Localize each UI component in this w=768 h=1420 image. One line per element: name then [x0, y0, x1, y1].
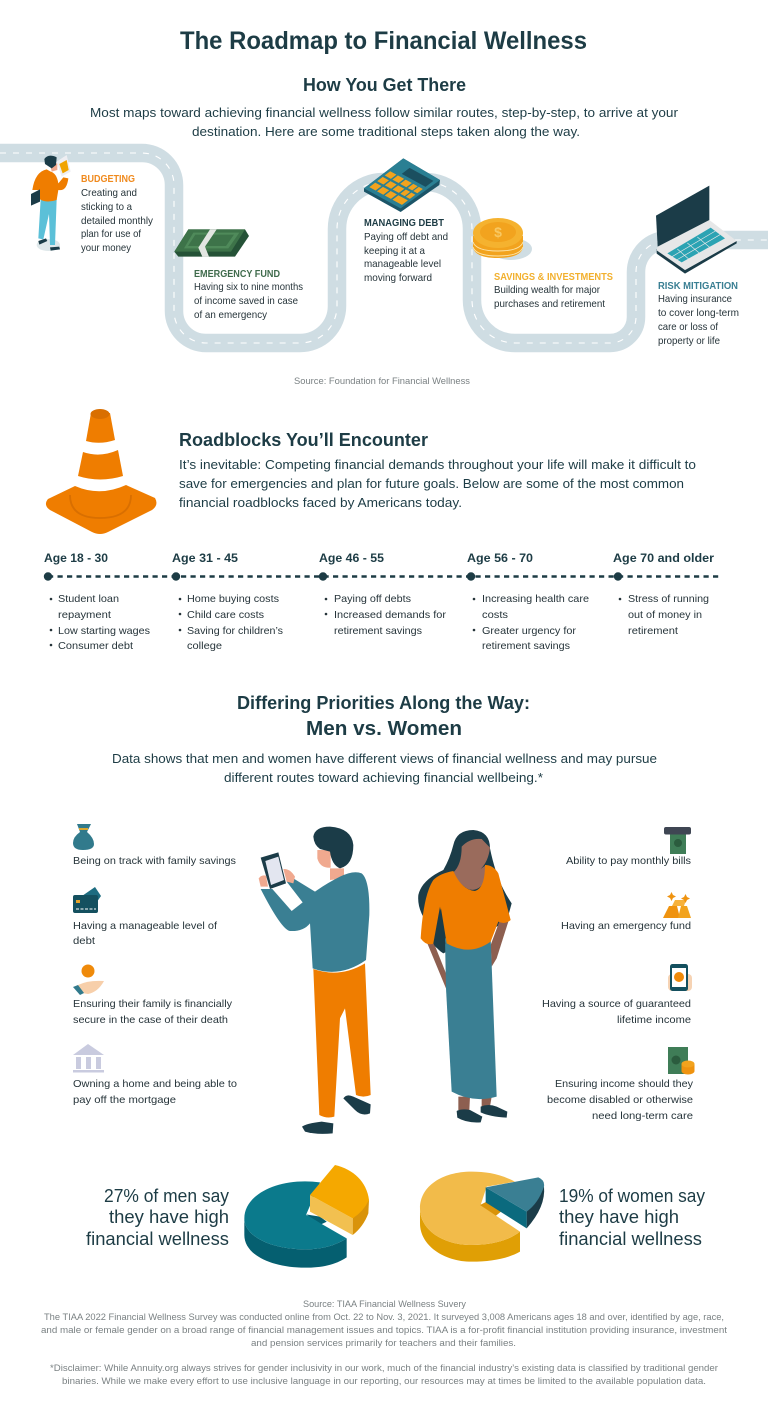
icon: money bag [73, 824, 94, 850]
text: emergency fund: of an emergency [194, 310, 268, 321]
icon: gold coins [473, 218, 532, 260]
text: home and mortgage [73, 1079, 237, 1106]
text: family secure [73, 999, 233, 1026]
text: managing debt: MANAGING DEBT [364, 217, 445, 229]
list: age 18-30: Student loan [58, 594, 119, 605]
text: risk mitigation: care or loss of [658, 322, 718, 333]
priorities intro text: different routes toward achieving financial wellbeing.* [224, 770, 543, 785]
text: family secure: secure in the case of their death [73, 1015, 228, 1026]
intro text: destination. Here are some traditional steps taken along the way. [192, 124, 580, 139]
footer: survey source: and pension services primarily for teachers and their families. [251, 1338, 516, 1348]
list: age 31-45: Child care costs [187, 610, 264, 621]
heading: differing priorities [237, 693, 530, 740]
text: managing debt: moving forward [364, 273, 432, 284]
roadblocks text: financial roadblocks faced by Americans today. [179, 495, 462, 510]
list: age 46-55: Paying off debts [334, 594, 411, 605]
illustration: man with phone [259, 827, 371, 1134]
icon: gold coins: $ [494, 224, 502, 240]
list: age 46-55 [325, 594, 447, 637]
text: disabled income: become disabled or otherwise [547, 1095, 693, 1106]
list: age 56-70: costs [482, 610, 508, 621]
icon: hand with coin [73, 964, 104, 995]
list: age 70 and older: retirement [628, 626, 678, 637]
text: risk mitigation: property or life [658, 336, 720, 347]
text: managing debt: keeping it at a [364, 246, 425, 257]
list: age 70 and older [619, 594, 709, 637]
priorities intro text: Data shows that men and women have different views of financial wellness and may pursue [112, 751, 657, 766]
text: budgeting: your money [81, 243, 132, 254]
text: disabled income: Ensuring income should they [555, 1079, 694, 1090]
footer: survey source: Source: TIAA Financial Wellness Suvery [303, 1299, 466, 1309]
icon: laptop [656, 186, 737, 274]
text: home and mortgage: pay off the mortgage [73, 1095, 176, 1106]
winding road [0, 153, 768, 343]
text: manageable debt [73, 921, 217, 947]
text: risk mitigation: RISK MITIGATION [658, 280, 738, 292]
timeline: Age 70 and older [613, 551, 714, 565]
list: age 56-70: Increasing health care [482, 594, 589, 605]
text: men stat: they have high [109, 1207, 229, 1227]
icon: bill and coins [668, 1047, 694, 1074]
text: emergency fund: Having six to nine months [194, 282, 303, 293]
list: age 56-70: Greater urgency for [482, 626, 577, 637]
heading: roadblocks: Roadblocks You’ll Encounter [179, 430, 428, 450]
list: age 18-30: Low starting wages [58, 626, 150, 637]
icon: traffic cone [46, 409, 156, 534]
footer: disclaimer [50, 1363, 718, 1386]
list: age 31-45: Saving for children’s [187, 626, 283, 637]
text: risk mitigation [658, 280, 739, 347]
text: men stat [86, 1186, 229, 1249]
intro text [90, 105, 679, 139]
icon: credit card [73, 887, 101, 913]
text: budgeting: plan for use of [81, 229, 141, 240]
text: disabled income: need long-term care [592, 1111, 693, 1122]
title: The Roadmap to Financial Wellness [180, 27, 587, 55]
list: age 18-30 [50, 594, 150, 652]
text: budgeting [81, 173, 154, 254]
chart: women pie 19% [420, 1172, 544, 1262]
text: men stat: 27% of men say [104, 1186, 229, 1206]
roadblocks text: save for emergencies and plan for future goals. Below are some of the most common [179, 476, 684, 491]
roadblocks text: It’s inevitable: Competing financial demands throughout your life will make it difficult to [179, 457, 696, 472]
list: age 46-55: retirement savings [334, 626, 422, 637]
text: budgeting: Creating and [81, 188, 137, 199]
text: emergency fund priority: Having an emergency fund [561, 921, 691, 932]
text: disabled income [547, 1079, 694, 1122]
text: savings and investments: SAVINGS & INVESTMENTS [494, 271, 613, 283]
footer: survey source [41, 1299, 727, 1348]
list: age 56-70 [473, 594, 589, 652]
text: managing debt [364, 217, 448, 284]
text: women stat [559, 1186, 705, 1249]
timeline [44, 551, 719, 581]
heading: differing priorities: Men vs. Women [306, 718, 462, 740]
footer: disclaimer: binaries. While we make every effort to use inclusive language in our reporting, our resources may at times be limited to the available population data. [62, 1376, 706, 1386]
intro text: Most maps toward achieving financial wellness follow similar routes, step-by-step, to arrive at your [90, 105, 679, 120]
illustration: woman [418, 830, 512, 1122]
text: women stat: 19% of women say [559, 1186, 705, 1206]
text: guaranteed income: Having a source of guaranteed [542, 999, 691, 1010]
list: age 31-45: Home buying costs [187, 594, 279, 605]
timeline: Age 46 - 55 [319, 551, 384, 565]
text: family savings: Being on track with family savings [73, 856, 236, 867]
list: age 46-55: Increased demands for [334, 610, 447, 621]
text: savings and investments [494, 271, 613, 310]
timeline: Age 56 - 70 [467, 551, 533, 565]
text: savings and investments: Building wealth for major [494, 285, 601, 296]
text: risk mitigation: Having insurance [658, 294, 732, 305]
text: men stat: financial wellness [86, 1229, 229, 1249]
timeline: Age 31 - 45 [172, 551, 238, 565]
icon: atm cash [664, 827, 691, 854]
text: family secure: Ensuring their family is financially [73, 999, 233, 1010]
icon: budgeting person [31, 155, 71, 251]
list: age 18-30: Consumer debt [58, 641, 133, 652]
text: home and mortgage: Owning a home and being able to [73, 1079, 237, 1090]
text: emergency fund: of income saved in case [194, 296, 298, 307]
text: women stat: financial wellness [559, 1229, 702, 1249]
text: budgeting: detailed monthly [81, 216, 154, 227]
footer: disclaimer: *Disclaimer: While Annuity.org always strives for gender inclusivity in our work, much of the financial industry’s existing data is classified by traditional gender [50, 1363, 718, 1373]
timeline: Age 18 - 30 [44, 551, 108, 565]
text: budgeting: sticking to a [81, 202, 132, 213]
list: age 70 and older: Stress of running [628, 594, 709, 605]
text: savings and investments: purchases and retirement [494, 299, 605, 310]
text: manageable debt: debt [73, 936, 95, 947]
footer: survey source: The TIAA 2022 Financial Wellness Survey was conducted online from Oct. 22 to Nov. 3, 2021. It surveyed 3,008 Americans ages 18 and over, identified by age, race, [44, 1312, 724, 1322]
text: manageable debt: Having a manageable level of [73, 921, 217, 932]
text: emergency fund [194, 268, 303, 321]
text: risk mitigation: to cover long-term [658, 308, 739, 319]
text: emergency fund: EMERGENCY FUND [194, 268, 280, 280]
heading: how you get there: How You Get There [303, 75, 466, 95]
list: age 31-45: college [187, 641, 222, 652]
text: guaranteed income [542, 999, 691, 1026]
chart: men pie 27% [244, 1165, 369, 1268]
text: women stat: they have high [559, 1207, 679, 1227]
footer: survey source: and male or female gender on a broad range of financial management issues and topics. TIAA is a for-profit financial institution providing insurance, investment [41, 1325, 727, 1335]
icon: bank building [73, 1044, 104, 1072]
text: guaranteed income: lifetime income [617, 1015, 691, 1026]
heading: differing priorities: Differing Priorities Along the Way: [237, 693, 530, 713]
list: age 18-30: repayment [58, 610, 111, 621]
list: age 70 and older: out of money in [628, 610, 702, 621]
icon: stack of cash [174, 229, 249, 257]
icon: calculator [364, 158, 440, 212]
list: age 31-45 [179, 594, 283, 652]
text: managing debt: Paying off debt and [364, 232, 448, 243]
list: age 56-70: retirement savings [482, 641, 570, 652]
text: monthly bills: Ability to pay monthly bills [566, 856, 691, 867]
icon: phone with coin [668, 964, 692, 991]
text: budgeting: BUDGETING [81, 173, 135, 185]
priorities intro text [112, 751, 657, 785]
source note: foundation: Source: Foundation for Financial Wellness [294, 376, 470, 386]
text: managing debt: manageable level [364, 259, 441, 270]
icon: gold bars [663, 892, 691, 918]
roadblocks text [179, 457, 696, 510]
